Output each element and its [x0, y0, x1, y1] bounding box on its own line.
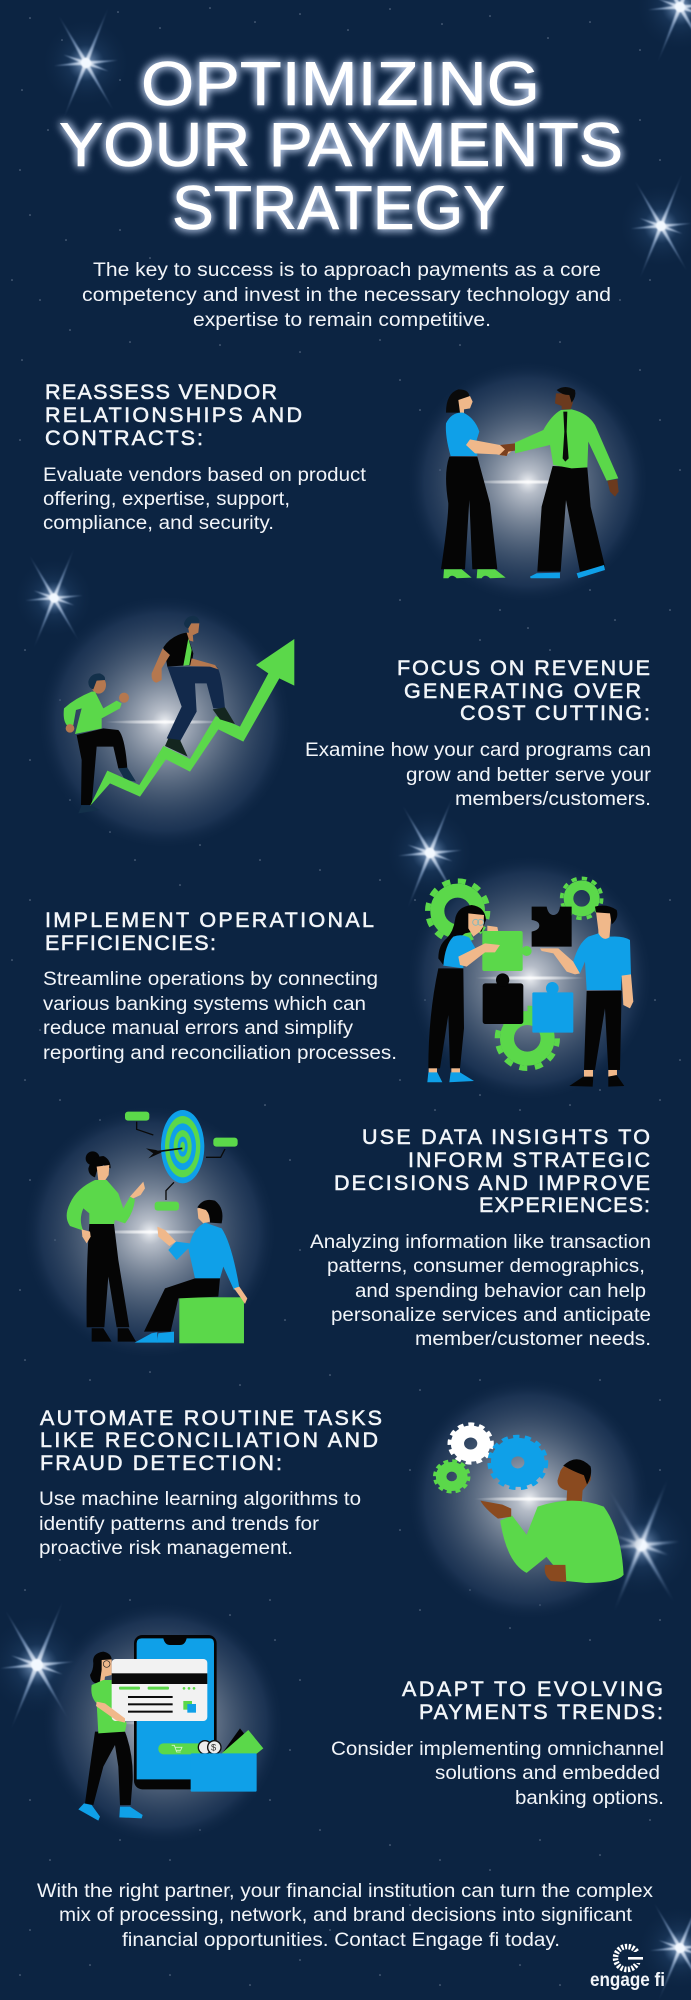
body: analyzing information: [310, 1232, 651, 1350]
body: examine card programs: grow and better serve your: [406, 765, 652, 786]
heading: implement operational efficiencies: EFFICIENCIES:: [45, 931, 216, 955]
heading: automate routine tasks: FRAUD DETECTION:: [40, 1451, 282, 1475]
panel: data insights: [22, 1104, 651, 1360]
heading: use data insights: EXPERIENCES:: [479, 1193, 650, 1217]
body: analyzing information: Analyzing information like transaction: [310, 1232, 651, 1253]
panel: operational efficiencies: [43, 854, 654, 1102]
heading: adapt to evolving: PAYMENTS TRENDS:: [419, 1700, 663, 1724]
body: evaluate vendors: offering, expertise, support,: [43, 489, 290, 510]
body: evaluate vendors: compliance, and security.: [43, 513, 274, 534]
body: streamline operations: reduce manual errors and simplify: [43, 1018, 354, 1039]
illustration: puzzle team: [406, 854, 654, 1102]
body: omnichannel: [331, 1739, 664, 1809]
body: examine card programs: members/customers.: [455, 789, 651, 810]
body: omnichannel: banking options.: [515, 1788, 664, 1809]
body: machine learning: identify patterns and trends for: [39, 1514, 320, 1535]
closing text: [37, 1881, 654, 1951]
intro text: expertise to remain competitive.: [193, 310, 491, 331]
body: machine learning: proactive risk management.: [39, 1538, 293, 1559]
body: streamline operations: reporting and reconciliation processes.: [43, 1043, 397, 1064]
heading: focus on revenue: COST CUTTING:: [460, 701, 650, 725]
illustration: target and analysts: [22, 1104, 278, 1360]
heading: focus on revenue: GENERATING OVER: [404, 679, 641, 703]
body: streamline operations: various banking systems which can: [43, 994, 366, 1015]
heading: reassess vendor: REASSESS VENDOR: [45, 380, 277, 404]
closing text: With the right partner, your financial institution can turn the complex: [37, 1881, 654, 1902]
intro text: [82, 260, 611, 331]
heading: reassess vendor: RELATIONSHIPS AND: [45, 403, 302, 427]
body: machine learning: Use machine learning algorithms to: [39, 1489, 361, 1510]
body: evaluate vendors: Evaluate vendors based on product: [43, 465, 367, 486]
body: machine learning: [39, 1489, 361, 1559]
panel: automate routine tasks: [39, 1377, 651, 1621]
heading: reassess vendor: CONTRACTS:: [45, 426, 203, 450]
panel: evolving payments trends: [41, 1601, 664, 1845]
body: analyzing information: personalize services and anticipate: [331, 1305, 651, 1326]
heading: implement operational efficiencies: [45, 908, 374, 955]
heading: adapt to evolving: ADAPT TO EVOLVING: [402, 1677, 663, 1701]
logo: engage fi: engage fi: [590, 1969, 665, 1991]
heading: focus on revenue: FOCUS ON REVENUE: [397, 656, 650, 680]
heading: automate routine tasks: AUTOMATE ROUTINE TASKS: [40, 1406, 382, 1430]
body: analyzing information: patterns, consumer demographics,: [327, 1256, 645, 1277]
title: YOUR PAYMENTS: [59, 111, 623, 180]
logo: engage fi: [590, 1946, 665, 1991]
body: analyzing information: member/customer needs.: [415, 1329, 651, 1350]
heading: use data insights: USE DATA INSIGHTS TO: [362, 1125, 650, 1149]
intro text: The key to success is to approach payments as a core: [93, 260, 601, 281]
body: evaluate vendors: [43, 465, 367, 534]
panel: revenue generating: [37, 594, 652, 850]
heading: automate routine tasks: [40, 1406, 382, 1475]
illustration: phone and card: $: [211, 1743, 217, 1753]
illustration: climbing growth arrow: [37, 594, 294, 850]
body: analyzing information: and spending behavior can help: [355, 1281, 646, 1302]
body: streamline operations: Streamline operations by connecting: [43, 969, 378, 990]
intro text: competency and invest in the necessary technology and: [82, 285, 611, 306]
heading: focus on revenue: [397, 656, 650, 725]
heading: use data insights: [334, 1125, 650, 1217]
title: STRATEGY: [172, 174, 505, 243]
illustration: handshake: [406, 360, 650, 604]
body: examine card programs: Examine how your card programs can: [305, 740, 651, 761]
title: [59, 50, 623, 243]
body: examine card programs: [305, 740, 652, 810]
panel: reassess vendor relationships: [43, 360, 650, 604]
body: streamline operations: [43, 969, 397, 1064]
closing text: financial opportunities. Contact Engage fi today.: [122, 1930, 560, 1951]
heading: reassess vendor: [45, 380, 302, 450]
heading: adapt to evolving: [402, 1677, 663, 1724]
heading: use data insights: INFORM STRATEGIC: [408, 1148, 650, 1172]
heading: use data insights: DECISIONS AND IMPROVE: [334, 1171, 650, 1195]
heading: implement operational efficiencies: IMPLEMENT OPERATIONAL: [45, 908, 374, 932]
title: OPTIMIZING: [141, 50, 540, 119]
illustration: phone and card: [41, 1601, 285, 1845]
heading: automate routine tasks: LIKE RECONCILIATION AND: [40, 1428, 378, 1452]
body: omnichannel: Consider implementing omnichannel: [331, 1739, 664, 1760]
body: omnichannel: solutions and embedded: [435, 1763, 660, 1784]
illustration: man with gears: [407, 1377, 651, 1621]
closing text: mix of processing, network, and brand decisions into significant: [59, 1905, 633, 1926]
